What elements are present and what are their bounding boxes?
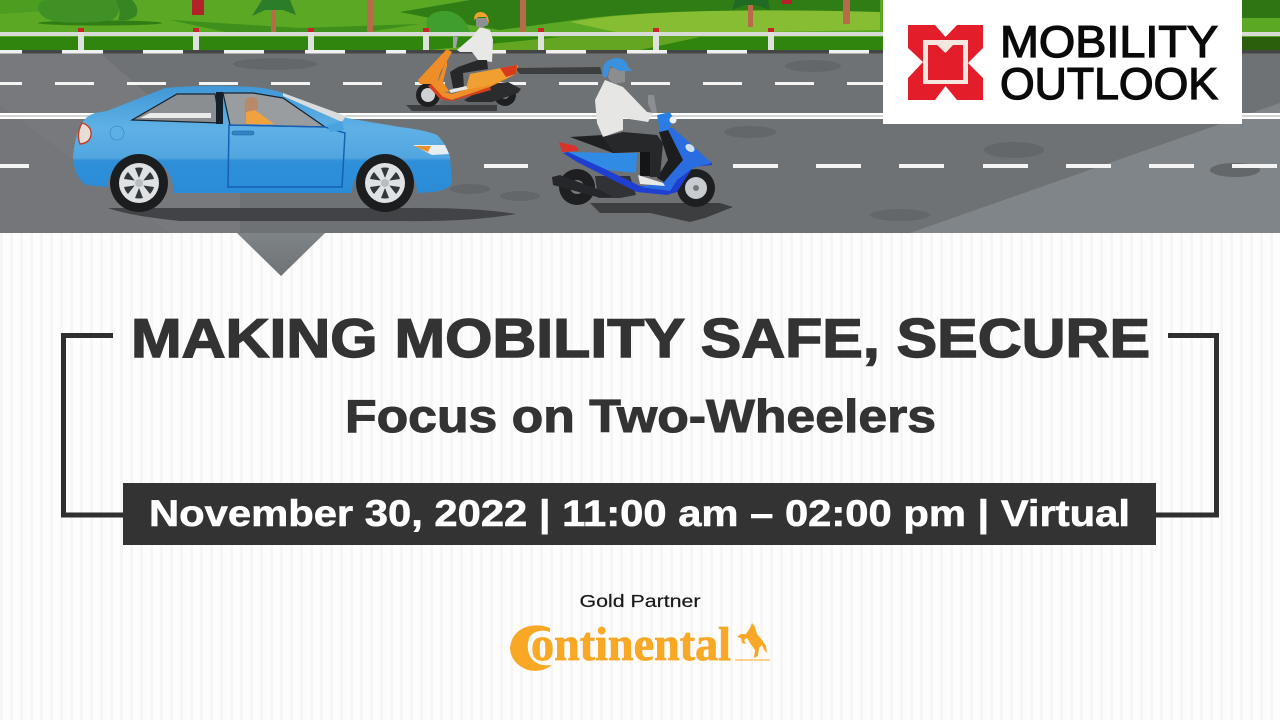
tail and head lamps xyxy=(78,123,91,144)
wheels xyxy=(416,83,516,107)
event date bar xyxy=(123,483,1156,545)
lane markings xyxy=(0,82,1280,168)
notch pointer under banner xyxy=(237,233,325,276)
road scene banner xyxy=(0,0,1280,233)
partner logo: Continental xyxy=(510,618,770,671)
scooter shadow xyxy=(590,203,733,222)
windows xyxy=(132,94,220,123)
patterned page background xyxy=(0,233,1280,720)
engine and exhaust xyxy=(464,82,521,102)
gold partner label: Gold Partner xyxy=(580,591,701,611)
driver xyxy=(245,97,274,124)
subtitle: Focus on Two-Wheelers xyxy=(345,390,936,442)
illustration: orange scooter rider xyxy=(406,12,602,111)
scooter body xyxy=(418,49,518,100)
partner C mark xyxy=(510,625,552,671)
seat and tail lamp xyxy=(570,135,640,153)
door xyxy=(228,125,345,187)
scooter shadow xyxy=(406,67,602,111)
illustration: blue car xyxy=(73,86,516,221)
scooter shield xyxy=(640,128,712,191)
scooter rear panel xyxy=(567,152,637,173)
logo mark xyxy=(908,25,983,100)
guard rail xyxy=(0,28,1280,50)
logo wordmark xyxy=(1000,18,1218,109)
logo wordmark: MOBILITY xyxy=(1000,18,1218,67)
logo panel: Mobility Outlook xyxy=(883,0,1242,124)
grass xyxy=(0,0,1280,52)
rider xyxy=(457,27,493,62)
car body xyxy=(73,86,452,193)
logo wordmark: OUTLOOK xyxy=(1000,60,1218,109)
rider xyxy=(595,80,653,137)
engine and exhaust xyxy=(595,176,636,198)
bushes and trees xyxy=(38,0,850,33)
event date bar: November 30, 2022 | 11:00 am – 02:00 pm | Virtual xyxy=(149,492,1130,535)
wheels xyxy=(110,154,414,212)
car shadow xyxy=(108,208,516,221)
title: MAKING MOBILITY SAFE, SECURE xyxy=(131,308,1150,369)
illustration: blue scooter rider xyxy=(552,58,733,222)
title bracket frame xyxy=(64,336,1216,515)
partner wordmark: ontinental xyxy=(531,618,731,671)
wheels xyxy=(559,169,715,207)
curb xyxy=(0,50,1280,54)
partner horse icon xyxy=(735,623,770,660)
road surface xyxy=(0,53,1280,233)
